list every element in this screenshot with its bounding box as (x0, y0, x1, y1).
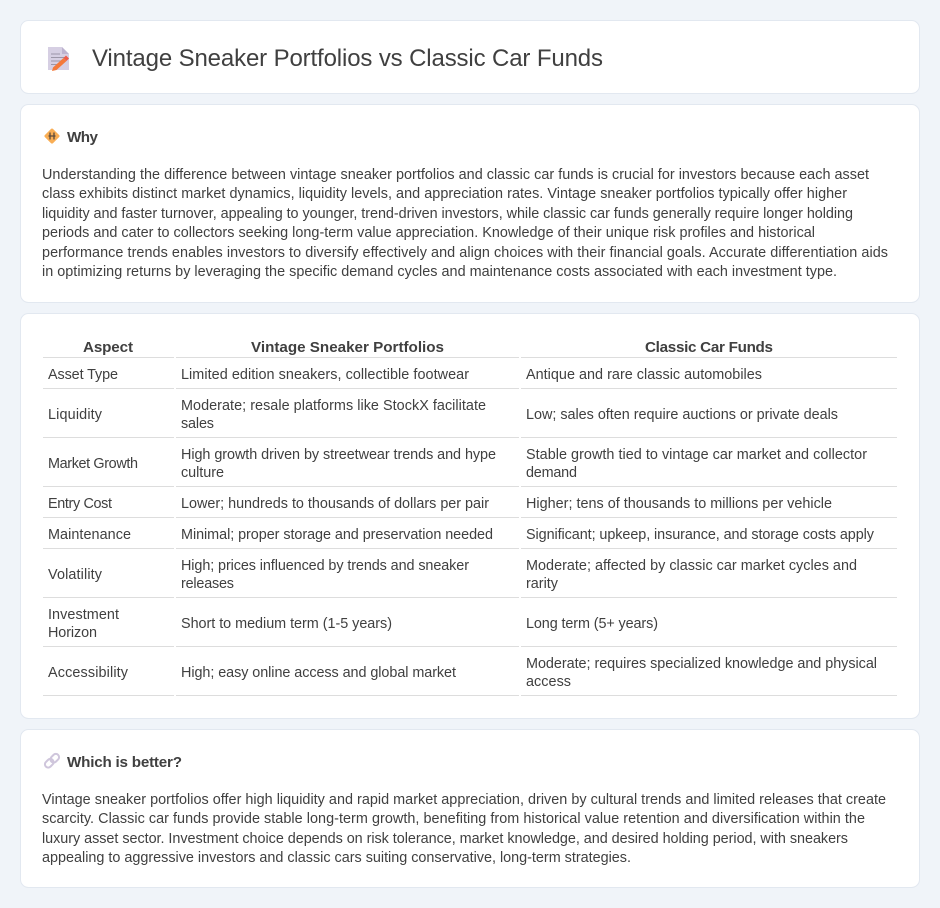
text block: why paragraph: Understanding the difference between vintage sneaker portfolios and classic car funds is crucial for investors because each asset (42, 167, 869, 183)
row: maintenance: Maintenance (48, 527, 131, 543)
row: asset type: Limited edition sneakers, collectible footwear (181, 367, 469, 383)
row: accessibility: Accessibility (48, 665, 129, 681)
row: liquidity: Liquidity (48, 407, 103, 423)
row: market growth (48, 447, 867, 481)
row: volatility: Moderate; affected by classic car market cycles and (526, 558, 857, 574)
row: asset type: Asset Type (48, 367, 118, 383)
row: liquidity: Moderate; resale platforms like StockX facilitate (181, 398, 486, 414)
text block: why paragraph: periods and cater to collectors seeking long-term value appreciation. Knowledge of their unique risk profiles and historical (42, 225, 815, 241)
row: market growth: Stable growth tied to vintage car market and collector (526, 447, 867, 463)
panel: comparison table (20, 314, 920, 718)
row: asset type (48, 367, 762, 383)
text block: why paragraph: class exhibits distinct market dynamics, liquidity levels, and appreciation rates. Vintage sneaker portfolios typically offer higher (42, 186, 847, 202)
row: entry cost (48, 496, 832, 512)
row: investment horizon: Horizon (48, 625, 97, 641)
text block: which is better paragraph: luxury asset sector. Investment choice depends on risk tolerance, market knowledge, and desired holding period, with sneakers (42, 831, 848, 847)
row: investment horizon: Investment (48, 607, 119, 623)
text block: why paragraph: liquidity and faster turnover, appealing to younger, trend-driven investors, while classic car funds generally require longer holding (42, 206, 853, 222)
row: accessibility: Moderate; requires specialized knowledge and physical (526, 656, 877, 672)
text block: why paragraph (42, 167, 888, 280)
row: investment horizon: Long term (5+ years) (526, 616, 658, 632)
row: volatility: Volatility (48, 567, 103, 583)
row: volatility (48, 558, 857, 592)
text block: which is better paragraph: Vintage sneaker portfolios offer high liquidity and rapid market appreciation, driven by cultural trends and limited releases that create (42, 792, 886, 808)
icon: chain link (44, 753, 60, 769)
text block: which is better paragraph: scarcity. Classic car funds provide stable long-term growth, benefiting from historical value retention and diversification within the (42, 811, 865, 827)
row: entry cost: Higher; tens of thousands to millions per vehicle (526, 496, 832, 512)
text block: why paragraph: performance trends enables investors to diversify effectively and align choices with their financial goals. Accurate differentiation aids (42, 245, 888, 261)
row: entry cost: Entry Cost (48, 496, 112, 512)
row: liquidity: Low; sales often require auctions or private deals (526, 407, 838, 423)
row: accessibility (48, 656, 877, 690)
icon: orange diamond (44, 128, 60, 144)
row: accessibility: High; easy online access and global market (181, 665, 456, 681)
heading: which is better: Which is better? (67, 754, 182, 771)
row: market growth: Market Growth (48, 456, 138, 472)
icon: document with pencil (48, 47, 69, 71)
heading: why: Why (67, 129, 99, 146)
table header row (83, 339, 773, 356)
panel: which is better (20, 730, 920, 888)
panel: title header (20, 20, 920, 94)
text block: which is better paragraph: appealing to aggressive investors and classic cars suiting conservative, long-term strategies. (42, 850, 631, 866)
row: volatility: High; prices influenced by trends and sneaker (181, 558, 469, 574)
row: accessibility: access (526, 674, 571, 690)
row: investment horizon (48, 607, 658, 641)
row: maintenance: Minimal; proper storage and preservation needed (181, 527, 493, 543)
row: volatility: rarity (526, 576, 559, 592)
title: Vintage Sneaker Portfolios vs Classic Car Funds (92, 45, 603, 72)
text block: why paragraph: in optimizing returns by leveraging the specific demand cycles and maintenance costs associated with each investment type. (42, 264, 837, 280)
table header row: Classic Car Funds (645, 339, 773, 356)
text block: which is better paragraph (42, 792, 886, 866)
row: market growth: demand (526, 465, 577, 481)
row: market growth: High growth driven by streetwear trends and hype (181, 447, 496, 463)
row: entry cost: Lower; hundreds to thousands of dollars per pair (181, 496, 489, 512)
row: volatility: releases (181, 576, 234, 592)
table header row: Aspect (83, 339, 133, 356)
row: liquidity: sales (181, 416, 214, 432)
row: liquidity (48, 398, 838, 432)
row: maintenance: Significant; upkeep, insurance, and storage costs apply (526, 527, 875, 543)
row: market growth: culture (181, 465, 224, 481)
table rules (43, 357, 897, 696)
row: asset type: Antique and rare classic automobiles (526, 367, 762, 383)
row: maintenance (48, 527, 875, 543)
table header row: Vintage Sneaker Portfolios (251, 339, 444, 356)
row: investment horizon: Short to medium term (1-5 years) (181, 616, 392, 632)
panel: why (20, 104, 920, 302)
